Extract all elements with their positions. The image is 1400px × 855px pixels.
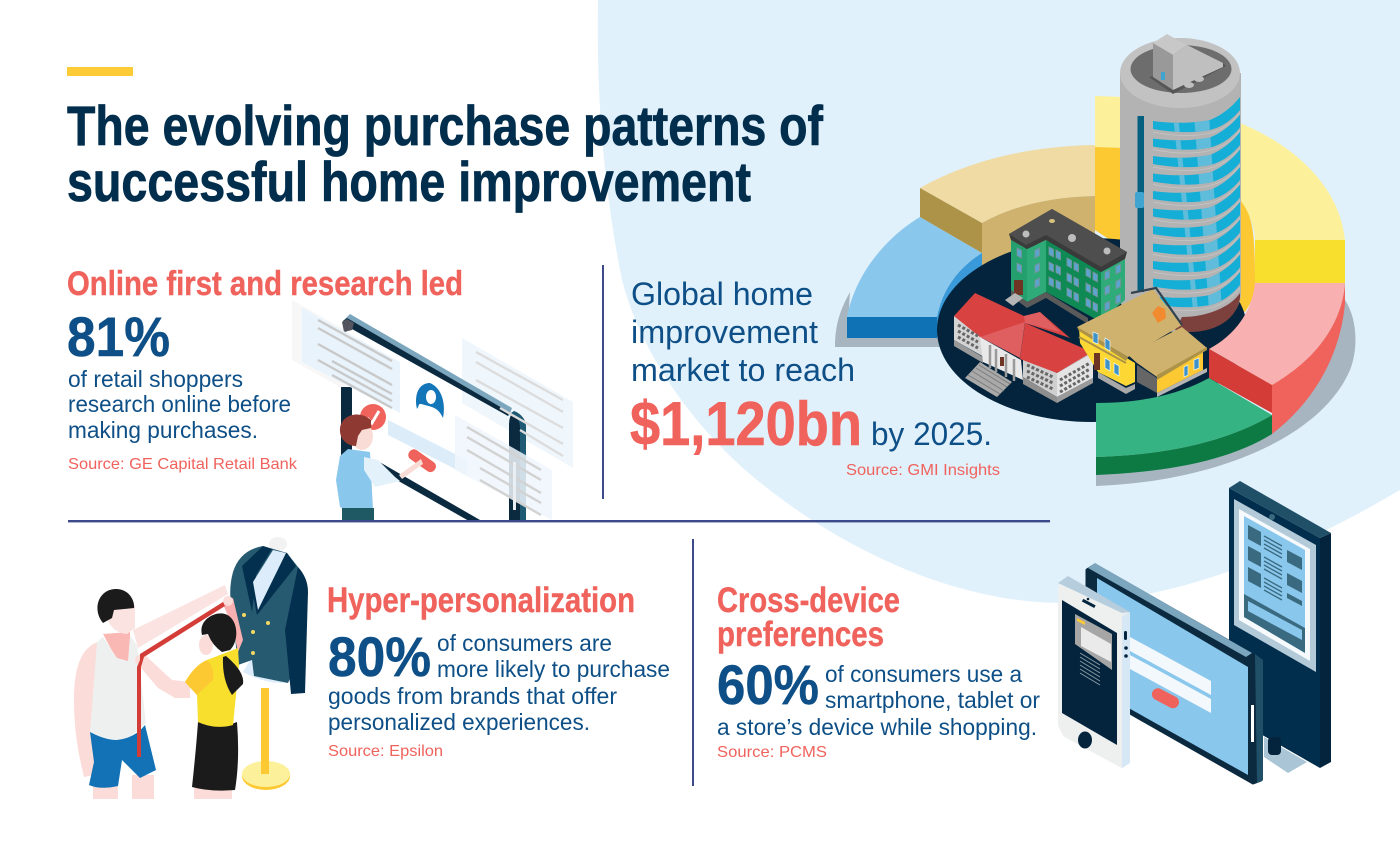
stat $1,120bn: $1,120bn xyxy=(630,390,862,459)
heading: preferences xyxy=(717,615,884,654)
heading: Online first and research led xyxy=(67,265,463,303)
illustration: tailor fitting xyxy=(74,537,308,799)
text block: personalized experiences. xyxy=(328,709,590,735)
icon: check badge xyxy=(360,404,386,430)
segment: blue xyxy=(847,217,982,338)
building: green apartments xyxy=(1005,209,1127,324)
text block: research online before xyxy=(68,391,291,417)
accent bar xyxy=(67,67,133,76)
title: successful home improvement xyxy=(67,150,751,213)
kiosk xyxy=(1229,481,1331,773)
section: global market xyxy=(630,276,1000,479)
building: museum xyxy=(954,293,1093,403)
text block: a store’s device while shopping. xyxy=(717,714,1037,740)
tablet xyxy=(1087,563,1263,783)
stat 81%: 81% xyxy=(67,305,170,368)
section: online first xyxy=(67,265,463,473)
text block: market to reach xyxy=(631,352,855,388)
stat 80%: 80% xyxy=(328,625,431,688)
text block: more likely to purchase xyxy=(437,656,670,682)
mannequin stand xyxy=(242,688,290,790)
text block: goods from brands that offer xyxy=(328,683,617,709)
text block: making purchases. xyxy=(68,417,258,443)
woman xyxy=(135,596,243,799)
text block: smartphone, tablet or xyxy=(825,687,1040,713)
building: tower xyxy=(1120,34,1241,332)
shadow xyxy=(835,292,1355,486)
text block xyxy=(631,276,855,388)
text block: improvement xyxy=(631,314,818,350)
title: The evolving purchase patterns of xyxy=(67,94,823,157)
text block xyxy=(68,366,291,443)
segment: tan xyxy=(920,145,1095,270)
section: hyper-personalization xyxy=(327,581,670,760)
by 2025: by 2025. xyxy=(871,416,992,452)
segment: pink xyxy=(1209,283,1345,434)
text block: of retail shoppers xyxy=(68,366,243,392)
person at tablet xyxy=(336,414,423,521)
heading: Cross-device xyxy=(717,581,900,620)
jacket xyxy=(230,537,308,694)
source: Source: GE Capital Retail Bank xyxy=(68,456,298,473)
text block xyxy=(717,661,1040,740)
section: cross-device xyxy=(717,581,1040,761)
illustration: devices xyxy=(1058,481,1331,783)
icon: profile avatar xyxy=(416,383,444,418)
divider xyxy=(602,265,604,499)
text block: Global home xyxy=(631,276,813,312)
source: Source: GMI Insights xyxy=(846,462,1000,479)
text block xyxy=(328,630,670,735)
background circle xyxy=(598,0,1400,603)
stat 60%: 60% xyxy=(717,653,819,716)
heading: Hyper-personalization xyxy=(327,581,635,620)
measuring tape xyxy=(137,602,225,757)
phone xyxy=(1058,576,1130,768)
hub xyxy=(937,238,1247,422)
segment: green xyxy=(1096,378,1272,475)
segment: yellow xyxy=(1095,96,1345,312)
text block: of consumers use a xyxy=(825,661,1022,687)
source: Source: PCMS xyxy=(717,744,827,761)
man xyxy=(74,585,228,799)
heading xyxy=(717,581,900,654)
chart: isometric donut with buildings xyxy=(835,34,1355,486)
rooftop box xyxy=(1149,34,1226,94)
building: yellow house xyxy=(1077,288,1207,397)
icon: red pill xyxy=(406,447,438,474)
title xyxy=(67,94,823,213)
text block: of consumers are xyxy=(437,630,612,656)
illustration: tablet with research panels xyxy=(292,300,573,521)
source: Source: Epsilon xyxy=(328,743,443,760)
